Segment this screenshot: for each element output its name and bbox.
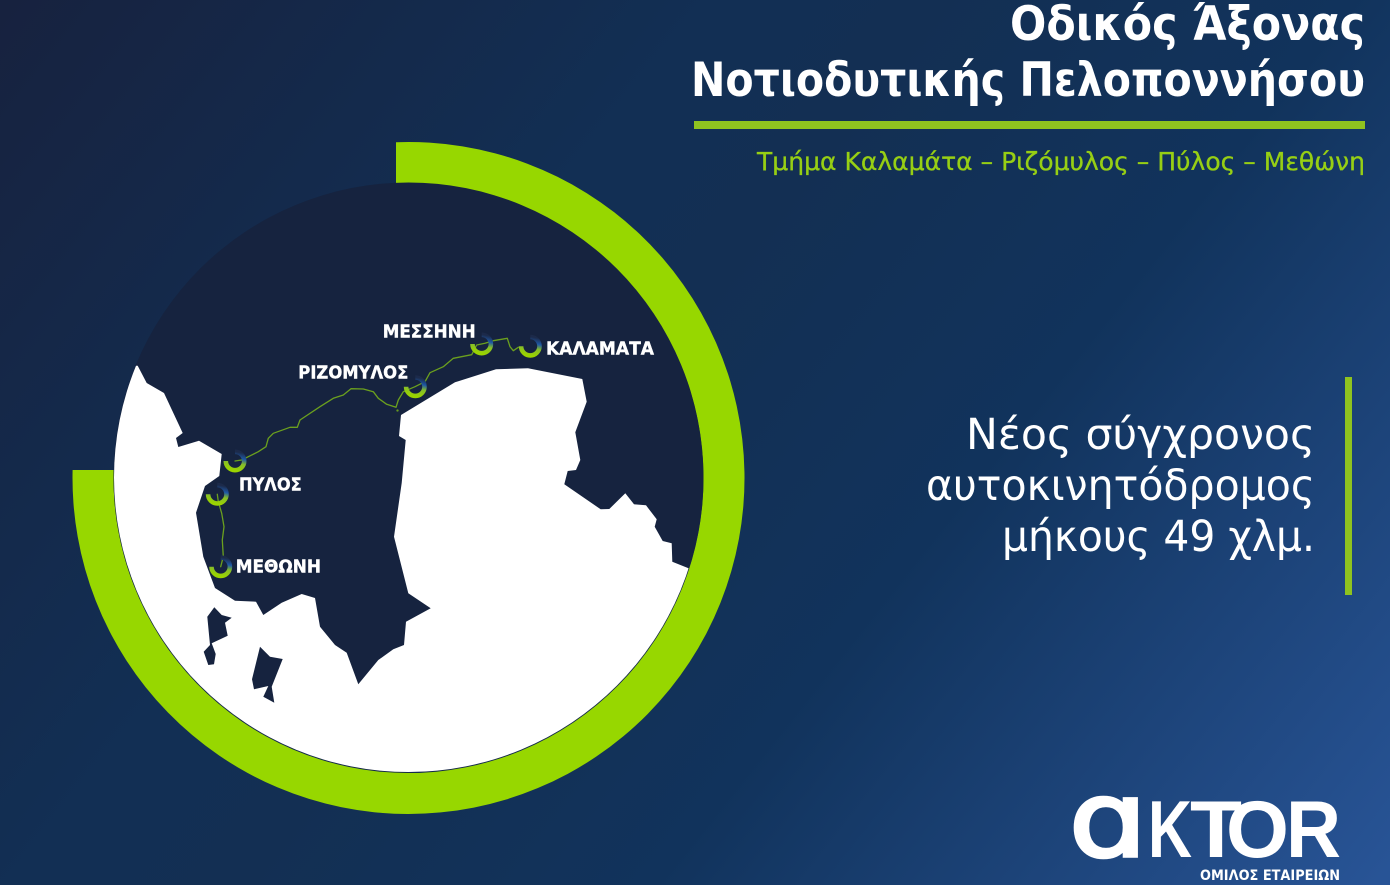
logo: AKTOR group: O: [1226, 785, 1289, 875]
title: [691, 0, 1365, 108]
subtitle: Τμήμα Καλαμάτα – Ριζόμυλος – Πύλος – Μεθώνη: [756, 147, 1365, 176]
logo: AKTOR group: [1069, 759, 1341, 884]
island: Schiza: [252, 647, 283, 703]
title underline: [694, 121, 1365, 129]
place label: Messini: ΜΕΣΣΗΝΗ: [383, 321, 476, 342]
place label: Rizomylos: ΡΙΖΟΜΥΛΟΣ: [298, 362, 408, 383]
place label: Pylos: ΠΥΛΟΣ: [239, 475, 302, 496]
logo: AKTOR group: ΟΜΙΛΟΣ ΕΤΑΙΡΕΙΩΝ: [1200, 868, 1340, 884]
place label: Methoni: ΜΕΘΩΝΗ: [236, 557, 321, 578]
callout accent bar: [1345, 377, 1352, 595]
callout: new motorway, 49 km: αυτοκινητόδρομος: [926, 461, 1315, 511]
logo: AKTOR group: K: [1148, 785, 1192, 875]
map disc: [114, 182, 704, 772]
marker: Pylos south: [208, 485, 227, 504]
place label: Kalamata: ΚΑΛΑΜΑΤΑ: [546, 338, 654, 359]
marker: Rizomylos: [406, 378, 424, 396]
marker: Methoni: [212, 558, 230, 576]
logo: AKTOR group: R: [1286, 785, 1341, 875]
marker: Pylos north: [226, 452, 244, 470]
logo: AKTOR group: ɑ: [1069, 759, 1147, 881]
logo: AKTOR group: T: [1190, 785, 1242, 875]
marker: Kalamata: [521, 337, 540, 355]
island: Sapientza: [204, 607, 232, 665]
callout: new motorway, 49 km: [926, 410, 1315, 562]
route line: [217, 338, 518, 567]
callout: new motorway, 49 km: μήκους 49 χλμ.: [1002, 512, 1315, 562]
marker: Messini: [472, 335, 491, 353]
callout: new motorway, 49 km: Νέος σύγχρονος: [966, 410, 1315, 460]
green ring: [73, 142, 745, 814]
land: white Peloponnese coast: [114, 366, 688, 772]
